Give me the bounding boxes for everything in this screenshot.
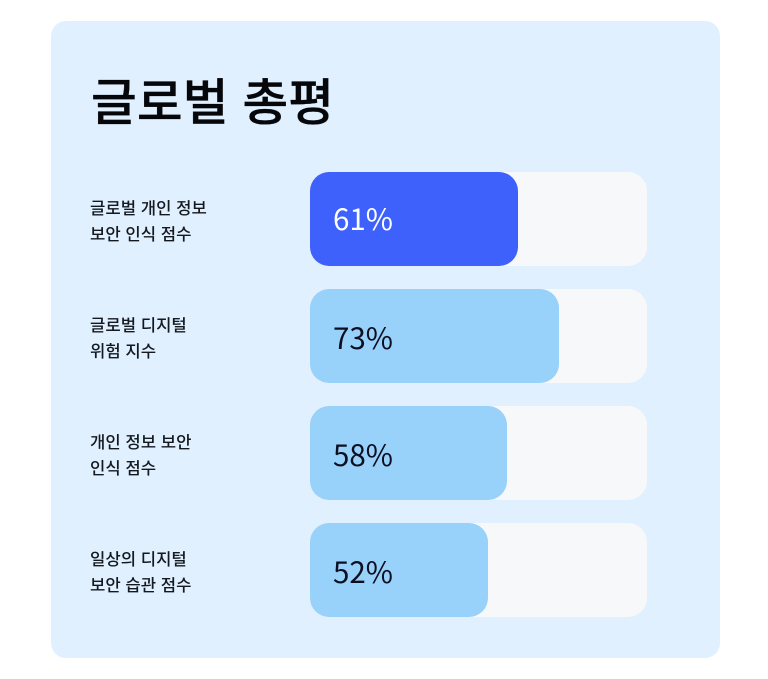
label: daily digital habits: 일상의 디지털 bbox=[90, 546, 187, 570]
bar fill: 52% bbox=[310, 523, 488, 617]
title: 글로벌 총평 bbox=[91, 63, 334, 135]
bar: 61% bbox=[310, 172, 647, 266]
label: daily digital habits bbox=[90, 546, 191, 596]
label: daily digital habits: 보안 습관 점수 bbox=[90, 572, 191, 596]
label: global privacy awareness bbox=[90, 195, 207, 245]
bar fill: 61% bbox=[310, 172, 518, 266]
label: global privacy awareness: 보안 인식 점수 bbox=[90, 221, 191, 245]
label: global digital risk: 위험 지수 bbox=[90, 338, 156, 362]
bar: 73% bbox=[310, 289, 647, 383]
bar: 58% bbox=[310, 406, 647, 500]
bar fill: 73% bbox=[310, 289, 559, 383]
value: 58%: 58% bbox=[333, 433, 393, 475]
label: privacy awareness: 인식 점수 bbox=[90, 455, 156, 479]
label: global privacy awareness: 글로벌 개인 정보 bbox=[90, 195, 207, 219]
label: global digital risk bbox=[90, 312, 187, 362]
label: global digital risk: 글로벌 디지털 bbox=[90, 312, 187, 336]
bar: 52% bbox=[310, 523, 647, 617]
value: 61%: 61% bbox=[333, 197, 393, 239]
label: privacy awareness: 개인 정보 보안 bbox=[90, 429, 191, 453]
value: 73%: 73% bbox=[333, 316, 393, 358]
label: privacy awareness bbox=[90, 429, 191, 479]
value: 52%: 52% bbox=[333, 550, 393, 592]
bar fill: 58% bbox=[310, 406, 507, 500]
